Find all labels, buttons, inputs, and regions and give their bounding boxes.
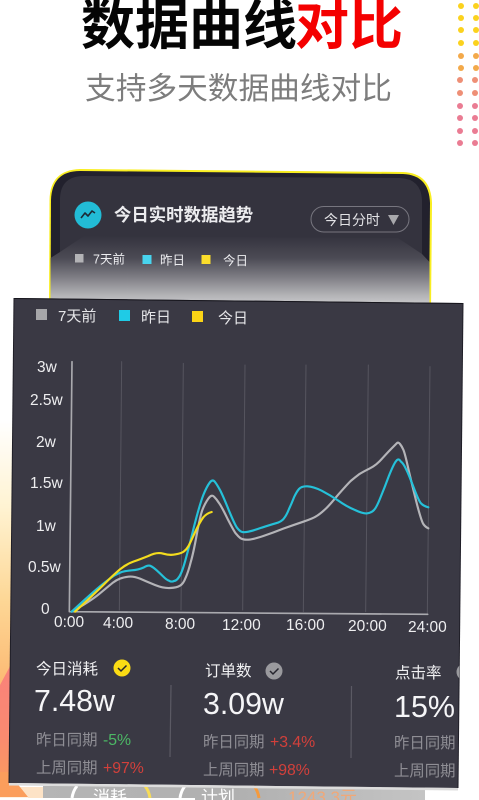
stat: orders: 订单数 [205,662,252,680]
x axis labels: 4:00 [103,615,134,632]
phone legend: 昨日 [160,254,185,268]
left pink shape [0,655,16,790]
chart legend: 7天前 [58,308,96,325]
chart legend: 昨日 [141,309,171,326]
y axis labels: 0 [41,601,50,618]
dropdown pill: 今日分时 [324,212,380,228]
bottom strip of phone [0,772,425,800]
stat: today spend: 上周同期 [36,759,98,777]
stat: click rate: 点击率 [395,664,442,682]
x axis labels: 16:00 [286,617,325,634]
screen fade [50,236,430,310]
stat: orders: 3.09w [203,688,284,721]
stat: today spend: 今日消耗 [36,660,98,678]
stat: today spend: 昨日同期 [36,731,98,749]
stat: today spend [34,660,144,777]
left background gradient [0,420,20,710]
icon: yellow check [114,660,130,676]
phone bezel [50,171,430,310]
x axis labels [54,614,447,636]
y axis labels: 2.5w [30,392,64,409]
x axis labels: 20:00 [348,618,387,635]
stat: click rate [394,664,460,778]
stat: orders [203,662,315,779]
stat: click rate: 上周同期 [394,762,456,780]
phone legend: 7天前 [93,252,125,266]
axes and curves [69,362,430,614]
x axis labels: 0:00 [54,614,85,631]
phone screen [60,176,422,310]
curve: 7 days ago [72,443,428,612]
icon: grey check [266,662,282,680]
stat: orders: +3.4% [270,734,315,751]
stat: orders: +98% [269,762,310,779]
stat: today spend: -5% [103,732,131,749]
stat: orders: 上周同期 [203,761,265,779]
y axis labels [28,359,64,618]
line chart [28,359,447,636]
strip tabs [72,786,77,798]
stat dividers [170,685,352,758]
x axis labels: 12:00 [222,617,261,634]
curve: yesterday [72,459,428,612]
stat: click rate: 昨日同期 [394,734,456,752]
panel: chart card [9,298,474,790]
stat: today spend: +97% [103,760,144,777]
stat: today spend: 7.48w [34,685,115,718]
phone heading: 今日实时数据趋势 [114,205,253,225]
phone heading icon: trend circle [74,202,102,228]
chart legend [36,308,248,327]
phone legend [75,252,248,268]
decorative dot grid [457,3,479,146]
phone legend: 今日 [223,253,248,268]
subtitle: 支持多天数据曲线对比 [85,71,392,106]
x axis labels: 8:00 [165,616,196,633]
y axis labels: 1.5w [30,475,64,492]
y axis labels: 3w [37,359,58,376]
y axis labels: 1w [36,518,57,535]
dropdown pill [311,206,409,232]
title [81,0,403,56]
stat: click rate: 15% [394,690,455,724]
phone mockup [49,169,432,310]
x axis labels: 24:00 [408,619,447,636]
y axis labels: 0.5w [28,559,62,576]
phone yellow outline [49,169,432,310]
curve: today [75,512,212,612]
stat: orders: 昨日同期 [203,733,265,751]
chart legend: 今日 [218,310,248,327]
y axis labels: 2w [36,434,57,451]
